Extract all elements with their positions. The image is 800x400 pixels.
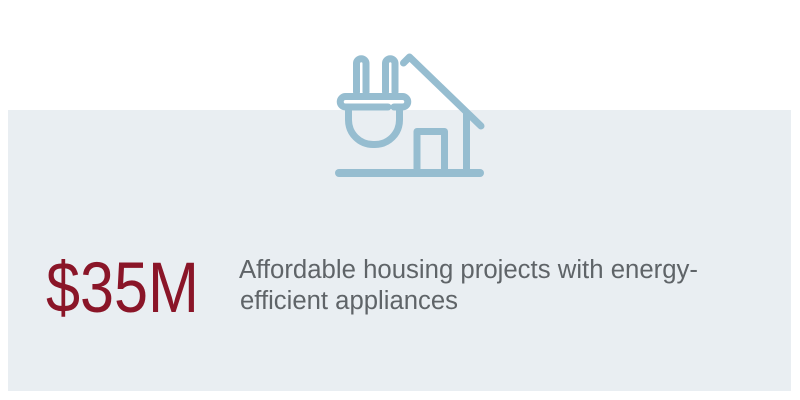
description line 1: Affordable housing projects with energy- — [239, 256, 698, 284]
panel: background — [8, 110, 791, 391]
house door — [417, 132, 444, 172]
house wall — [463, 113, 470, 172]
ground line — [339, 169, 480, 177]
plug prongs — [356, 59, 395, 92]
description line 2: efficient appliances — [240, 287, 458, 315]
amount: $35M: $35M — [46, 249, 199, 328]
plug flange — [340, 96, 408, 107]
description text — [239, 256, 698, 315]
plug body — [348, 108, 400, 144]
icon: plug and house — [339, 57, 481, 173]
house roof — [404, 57, 481, 126]
